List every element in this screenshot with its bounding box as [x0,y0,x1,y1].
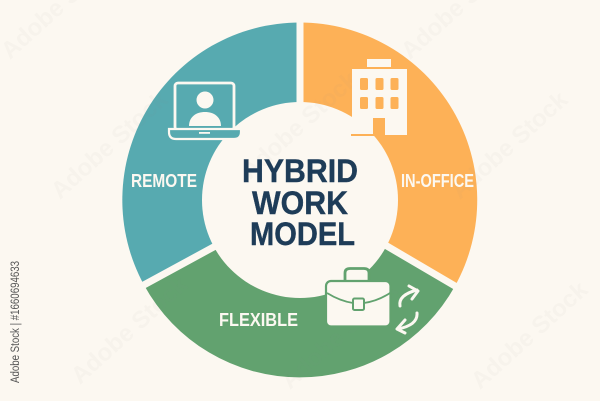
icon: briefcase [326,268,390,326]
watermark: Adobe Stock [276,276,404,394]
credit line: Adobe Stock | #1660694633 [10,261,22,383]
label: remote: REMOTE [131,171,197,191]
watermark: Adobe Stock [66,271,194,389]
heading: WORK [252,185,348,221]
icon: cycle arrows [397,286,418,333]
watermark: Adobe Stock [446,86,574,204]
watermark: Adobe Stock [466,276,594,394]
heading: MODEL [250,216,355,252]
icon: office building [351,59,407,136]
watermark: Adobe Stock [46,86,174,204]
heading: HYBRID [242,153,358,189]
donut chart segments [122,15,477,377]
label: in-office: IN-OFFICE [401,171,474,191]
icon: laptop with person [169,83,241,139]
watermark: Adobe Stock [236,66,364,184]
label: flexible: FLEXIBLE [219,310,298,330]
heading [242,153,358,252]
